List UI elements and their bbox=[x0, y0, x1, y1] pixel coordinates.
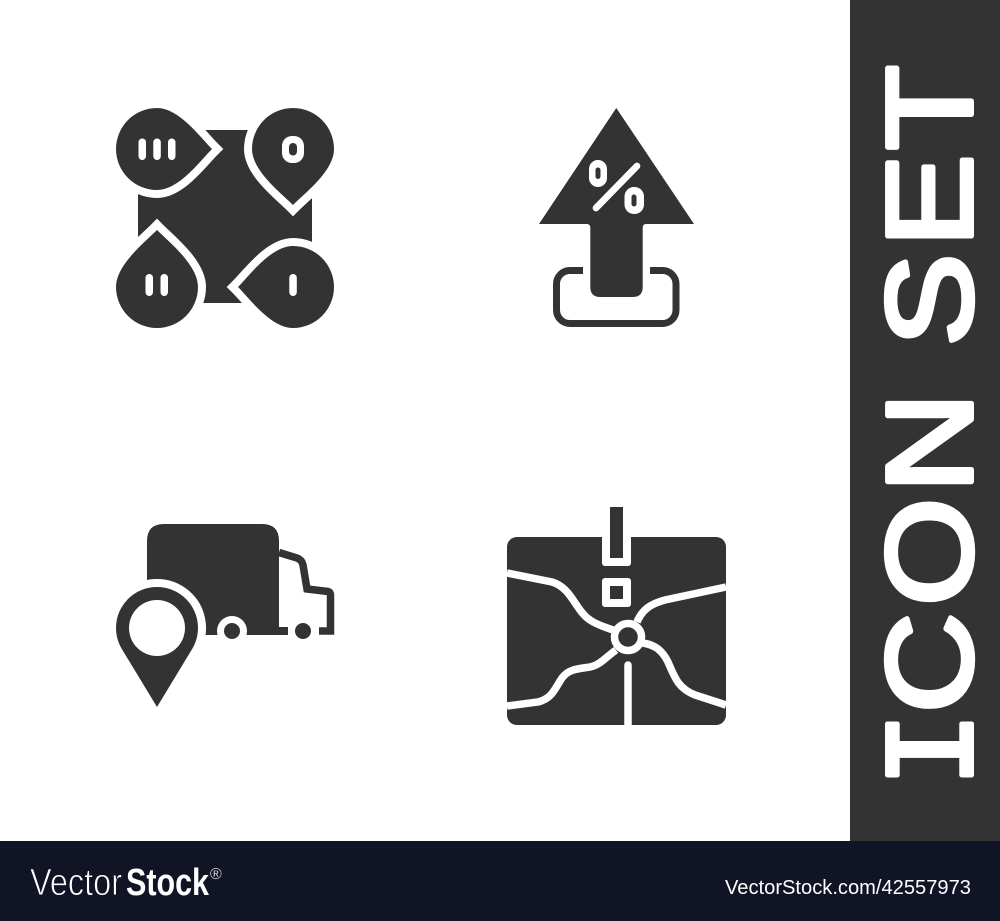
footer logo: VectorStock: Stock bbox=[126, 862, 210, 904]
location pin bbox=[116, 587, 198, 707]
footer image id: VectorStock.com/42557973 bbox=[725, 877, 971, 899]
pin: zero bbox=[252, 108, 334, 205]
pin: three bars bbox=[116, 108, 212, 190]
tray bbox=[556, 270, 676, 324]
sidebar title: ICON SET: T bbox=[861, 65, 998, 150]
footer bar bbox=[0, 841, 1000, 921]
roads bbox=[507, 573, 726, 725]
sidebar title: ICON SET: O bbox=[861, 498, 998, 606]
sidebar title: ICON SET bbox=[861, 65, 1000, 788]
icon: road map with exclamation mark bbox=[507, 507, 726, 725]
icon: delivery truck with location pin bbox=[116, 524, 330, 707]
pin: one bar bbox=[238, 246, 334, 328]
sidebar panel bbox=[850, 0, 1000, 841]
footer logo: VectorStock: Vector bbox=[30, 862, 122, 904]
pin: two bars bbox=[116, 230, 198, 328]
wheels bbox=[217, 616, 318, 646]
percent sign bbox=[589, 160, 644, 214]
footer logo: VectorStock bbox=[30, 862, 222, 904]
sidebar title: ICON SET: N bbox=[861, 392, 998, 493]
sidebar title: ICON SET: S bbox=[861, 254, 998, 346]
truck body bbox=[147, 524, 288, 635]
icon: square with four numbered pins bbox=[116, 108, 334, 328]
truck cab bbox=[279, 552, 330, 631]
arrow bbox=[539, 108, 694, 297]
exclamation mark bbox=[602, 507, 631, 607]
icon: upward percent arrow with tray bbox=[539, 108, 694, 324]
footer logo: VectorStock: ® bbox=[210, 866, 222, 883]
sidebar title: ICON SET: E bbox=[861, 154, 998, 247]
sidebar title: ICON SET: C bbox=[861, 613, 998, 713]
